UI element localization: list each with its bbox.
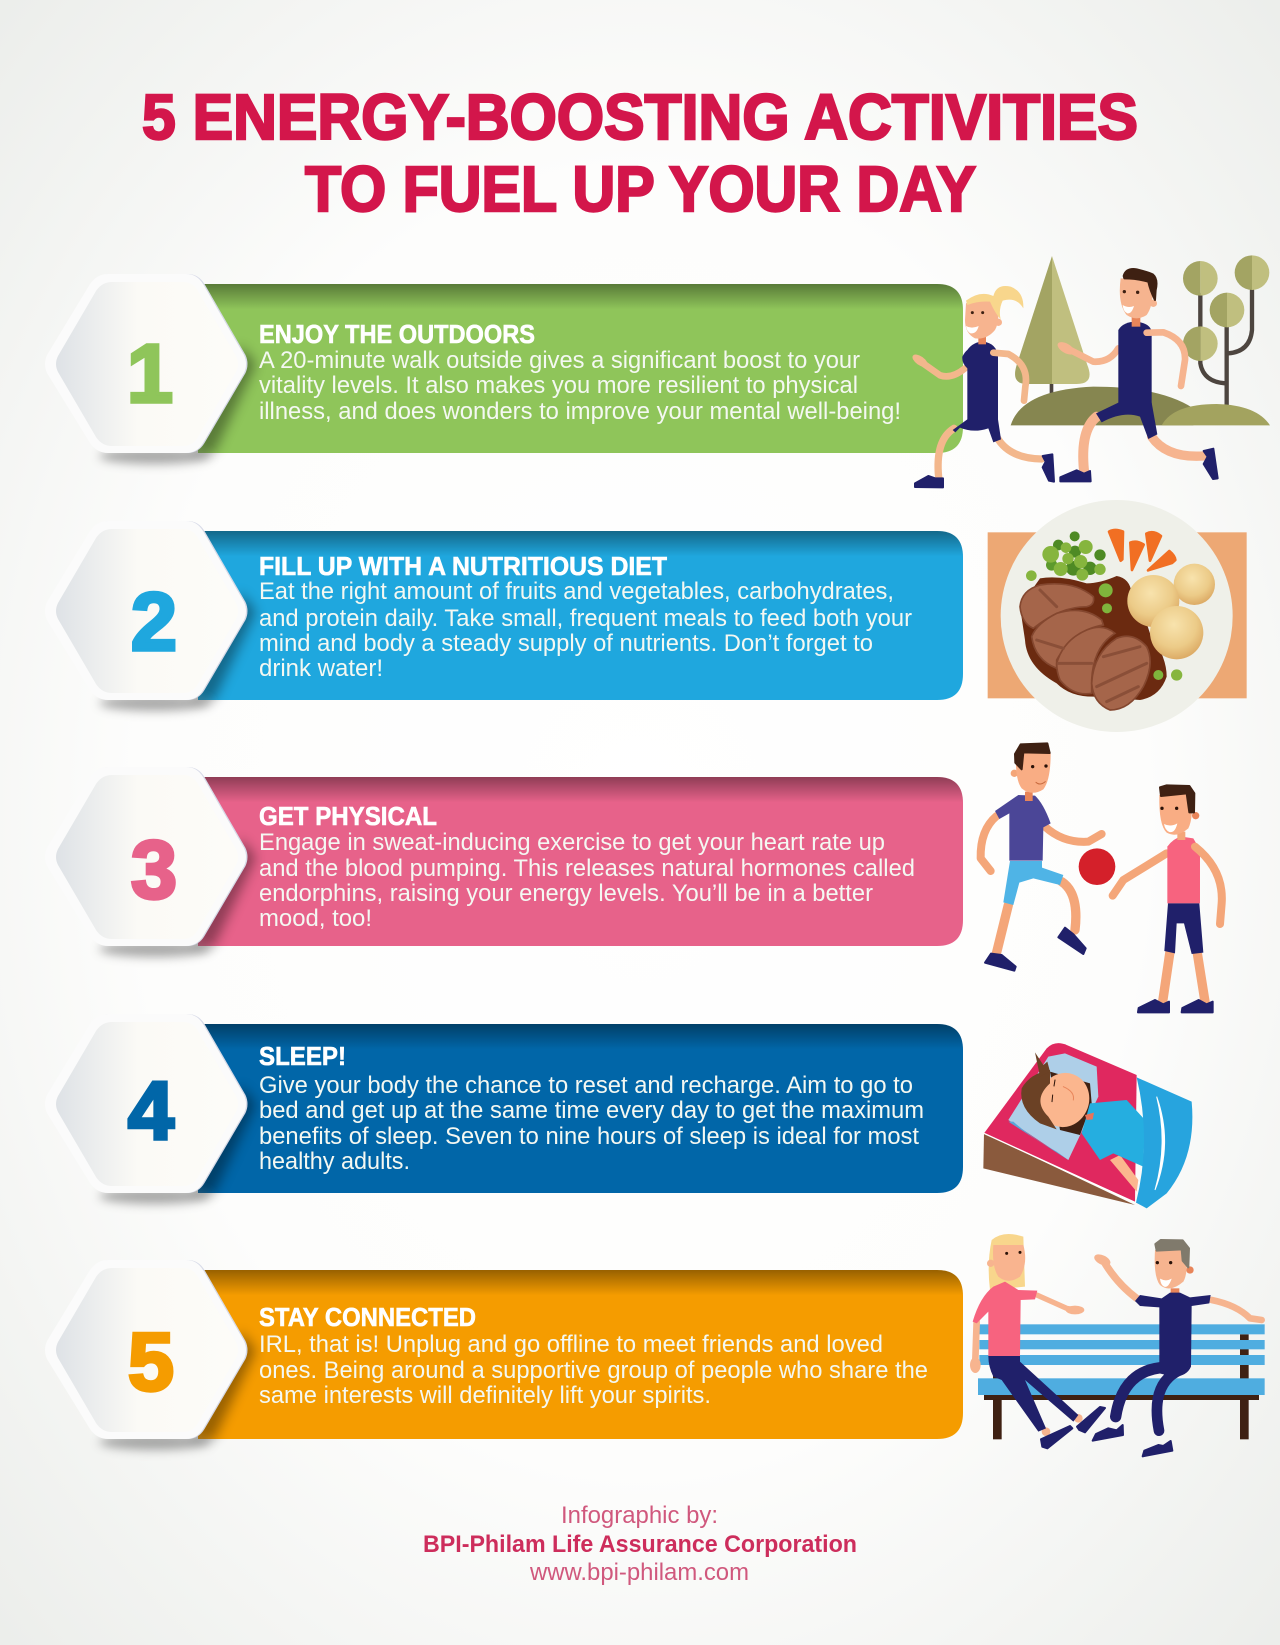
trees and hills bbox=[1011, 255, 1270, 425]
footer credit: www.bpi-philam.com bbox=[529, 1559, 749, 1586]
body 2: Eat the right amount of fruits and vegetables, carbohydrates, bbox=[259, 578, 894, 605]
illustration: friends on a bench bbox=[970, 1234, 1265, 1456]
body 3 bbox=[259, 829, 915, 932]
footer credit bbox=[423, 1502, 857, 1586]
number 3: 3 bbox=[131, 823, 177, 916]
body 3: endorphins, raising your energy levels. You’ll be in a better bbox=[259, 880, 873, 907]
gravy bbox=[1020, 576, 1167, 700]
number 1: 1 bbox=[127, 327, 173, 420]
band 3 bbox=[198, 777, 963, 946]
bed base bbox=[983, 1133, 1135, 1205]
body 3: and the blood pumping. This releases natural hormones called bbox=[259, 855, 915, 882]
illustration: two men playing ball bbox=[981, 743, 1222, 1012]
bench bbox=[978, 1324, 1265, 1439]
man with ball bbox=[981, 743, 1102, 971]
title: 5 ENERGY-BOOSTING ACTIVITIES bbox=[142, 81, 1138, 153]
heading 1: ENJOY THE OUTDOORS bbox=[259, 319, 535, 349]
peas bbox=[1026, 531, 1182, 681]
body 4: Give your body the chance to reset and recharge. Aim to go to bbox=[259, 1072, 913, 1099]
footer credit: BPI-Philam Life Assurance Corporation bbox=[423, 1531, 857, 1558]
number 4: 4 bbox=[128, 1064, 174, 1157]
panel 5: stay connected bbox=[45, 1260, 963, 1450]
hexagon 3 bbox=[45, 767, 248, 957]
pillow bbox=[1008, 1053, 1098, 1160]
hexagon 2 bbox=[45, 521, 248, 711]
title: TO FUEL UP YOUR DAY bbox=[305, 153, 976, 225]
body 4: healthy adults. bbox=[259, 1148, 410, 1175]
body 3: mood, too! bbox=[259, 905, 372, 932]
panel 4: sleep bbox=[45, 1014, 963, 1204]
band 5 bbox=[198, 1270, 963, 1439]
band 1 bbox=[198, 284, 963, 453]
body 5: same interests will definitely lift your spirits. bbox=[259, 1382, 711, 1409]
sleeper bbox=[1021, 1052, 1145, 1192]
body 5 bbox=[259, 1331, 928, 1409]
body 2: and protein daily. Take small, frequent meals to feed both your bbox=[259, 605, 912, 632]
body 5: ones. Being around a supportive group of people who share the bbox=[259, 1357, 928, 1384]
mattress bbox=[984, 1043, 1137, 1202]
man in pink shirt bbox=[1113, 785, 1222, 1012]
footer credit: Infographic by: bbox=[561, 1502, 718, 1529]
illustration: dinner plate bbox=[988, 500, 1247, 732]
body 3: Engage in sweat-inducing exercise to get your heart rate up bbox=[259, 829, 885, 856]
hexagon 4 bbox=[45, 1014, 248, 1204]
body 4: benefits of sleep. Seven to nine hours of sleep is ideal for most bbox=[259, 1123, 919, 1150]
heading 2: FILL UP WITH A NUTRITIOUS DIET bbox=[259, 551, 667, 581]
body 4: bed and get up at the same time every day to get the maximum bbox=[259, 1097, 924, 1124]
plate bbox=[1001, 500, 1233, 732]
meat slices bbox=[1020, 584, 1150, 710]
body 1: A 20-minute walk outside gives a significant boost to your bbox=[259, 347, 860, 374]
title bbox=[142, 81, 1138, 225]
body 2: drink water! bbox=[259, 655, 383, 682]
heading 3: GET PHYSICAL bbox=[259, 801, 437, 831]
hexagon 5 bbox=[45, 1260, 248, 1450]
panel 3: get physical bbox=[45, 767, 963, 957]
body 2: mind and body a steady supply of nutrients. Don’t forget to bbox=[259, 630, 873, 657]
heading 4: SLEEP! bbox=[259, 1041, 346, 1071]
heading 5: STAY CONNECTED bbox=[259, 1302, 476, 1332]
body 1 bbox=[259, 347, 901, 425]
blanket bbox=[1136, 1077, 1192, 1208]
panel 2: nutritious diet bbox=[45, 521, 963, 711]
placemat bbox=[988, 532, 1247, 698]
illustration: person sleeping in bed bbox=[983, 1043, 1192, 1208]
body 1: illness, and does wonders to improve your mental well-being! bbox=[259, 398, 901, 425]
hexagon 1 bbox=[45, 274, 248, 464]
man bbox=[1093, 1240, 1262, 1456]
body 5: IRL, that is! Unplug and go offline to meet friends and loved bbox=[259, 1331, 883, 1358]
illustration: runners in a park bbox=[910, 255, 1270, 487]
panel 1: enjoy the outdoors bbox=[45, 274, 963, 464]
body 4 bbox=[259, 1072, 924, 1175]
potatoes bbox=[1127, 564, 1215, 659]
number 5: 5 bbox=[128, 1315, 174, 1408]
band 2 bbox=[198, 531, 963, 700]
carrots bbox=[1109, 530, 1175, 570]
man runner bbox=[1056, 269, 1218, 481]
woman runner bbox=[910, 286, 1054, 487]
red ball bbox=[1079, 848, 1115, 885]
band 4 bbox=[198, 1024, 963, 1193]
number 2: 2 bbox=[131, 575, 177, 668]
body 2 bbox=[259, 578, 912, 682]
body 1: vitality levels. It also makes you more resilient to physical bbox=[259, 372, 858, 399]
woman bbox=[970, 1234, 1105, 1448]
